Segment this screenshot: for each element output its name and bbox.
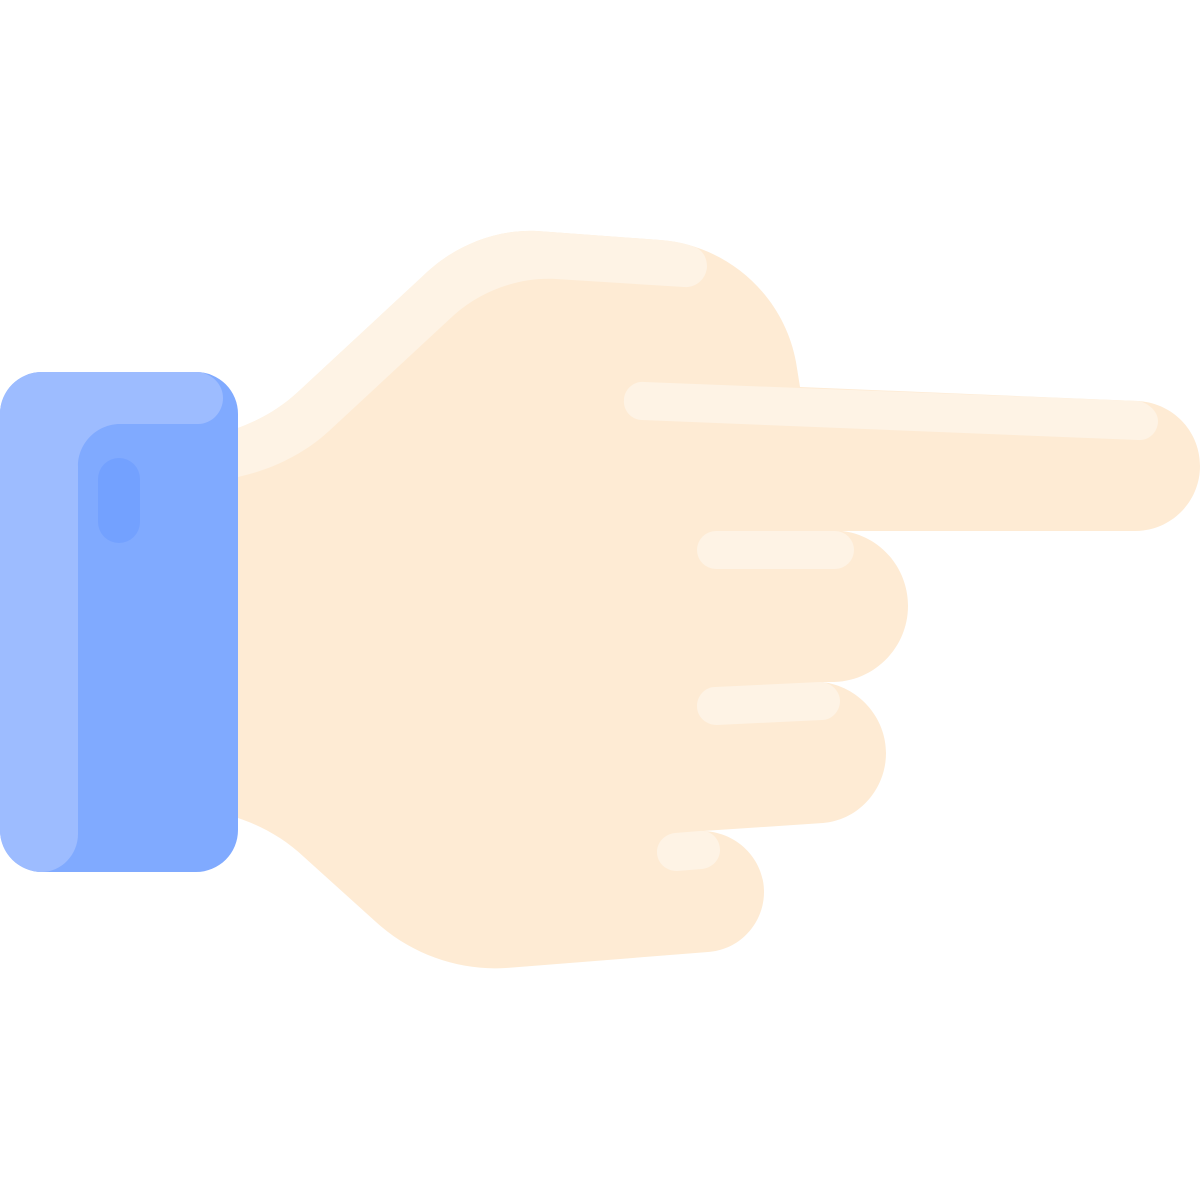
hand bbox=[238, 231, 1200, 968]
highlight: back of hand bbox=[238, 231, 707, 477]
highlight: middle finger bbox=[697, 531, 854, 569]
cuff bbox=[0, 372, 238, 872]
hand base shape bbox=[238, 231, 1200, 968]
cuff button bbox=[98, 458, 140, 543]
highlight: ring finger bbox=[697, 682, 840, 725]
highlight: index finger bbox=[624, 382, 1158, 440]
cuff base bbox=[0, 372, 238, 872]
cuff highlight bbox=[0, 372, 223, 872]
highlight: little finger bbox=[657, 831, 720, 871]
